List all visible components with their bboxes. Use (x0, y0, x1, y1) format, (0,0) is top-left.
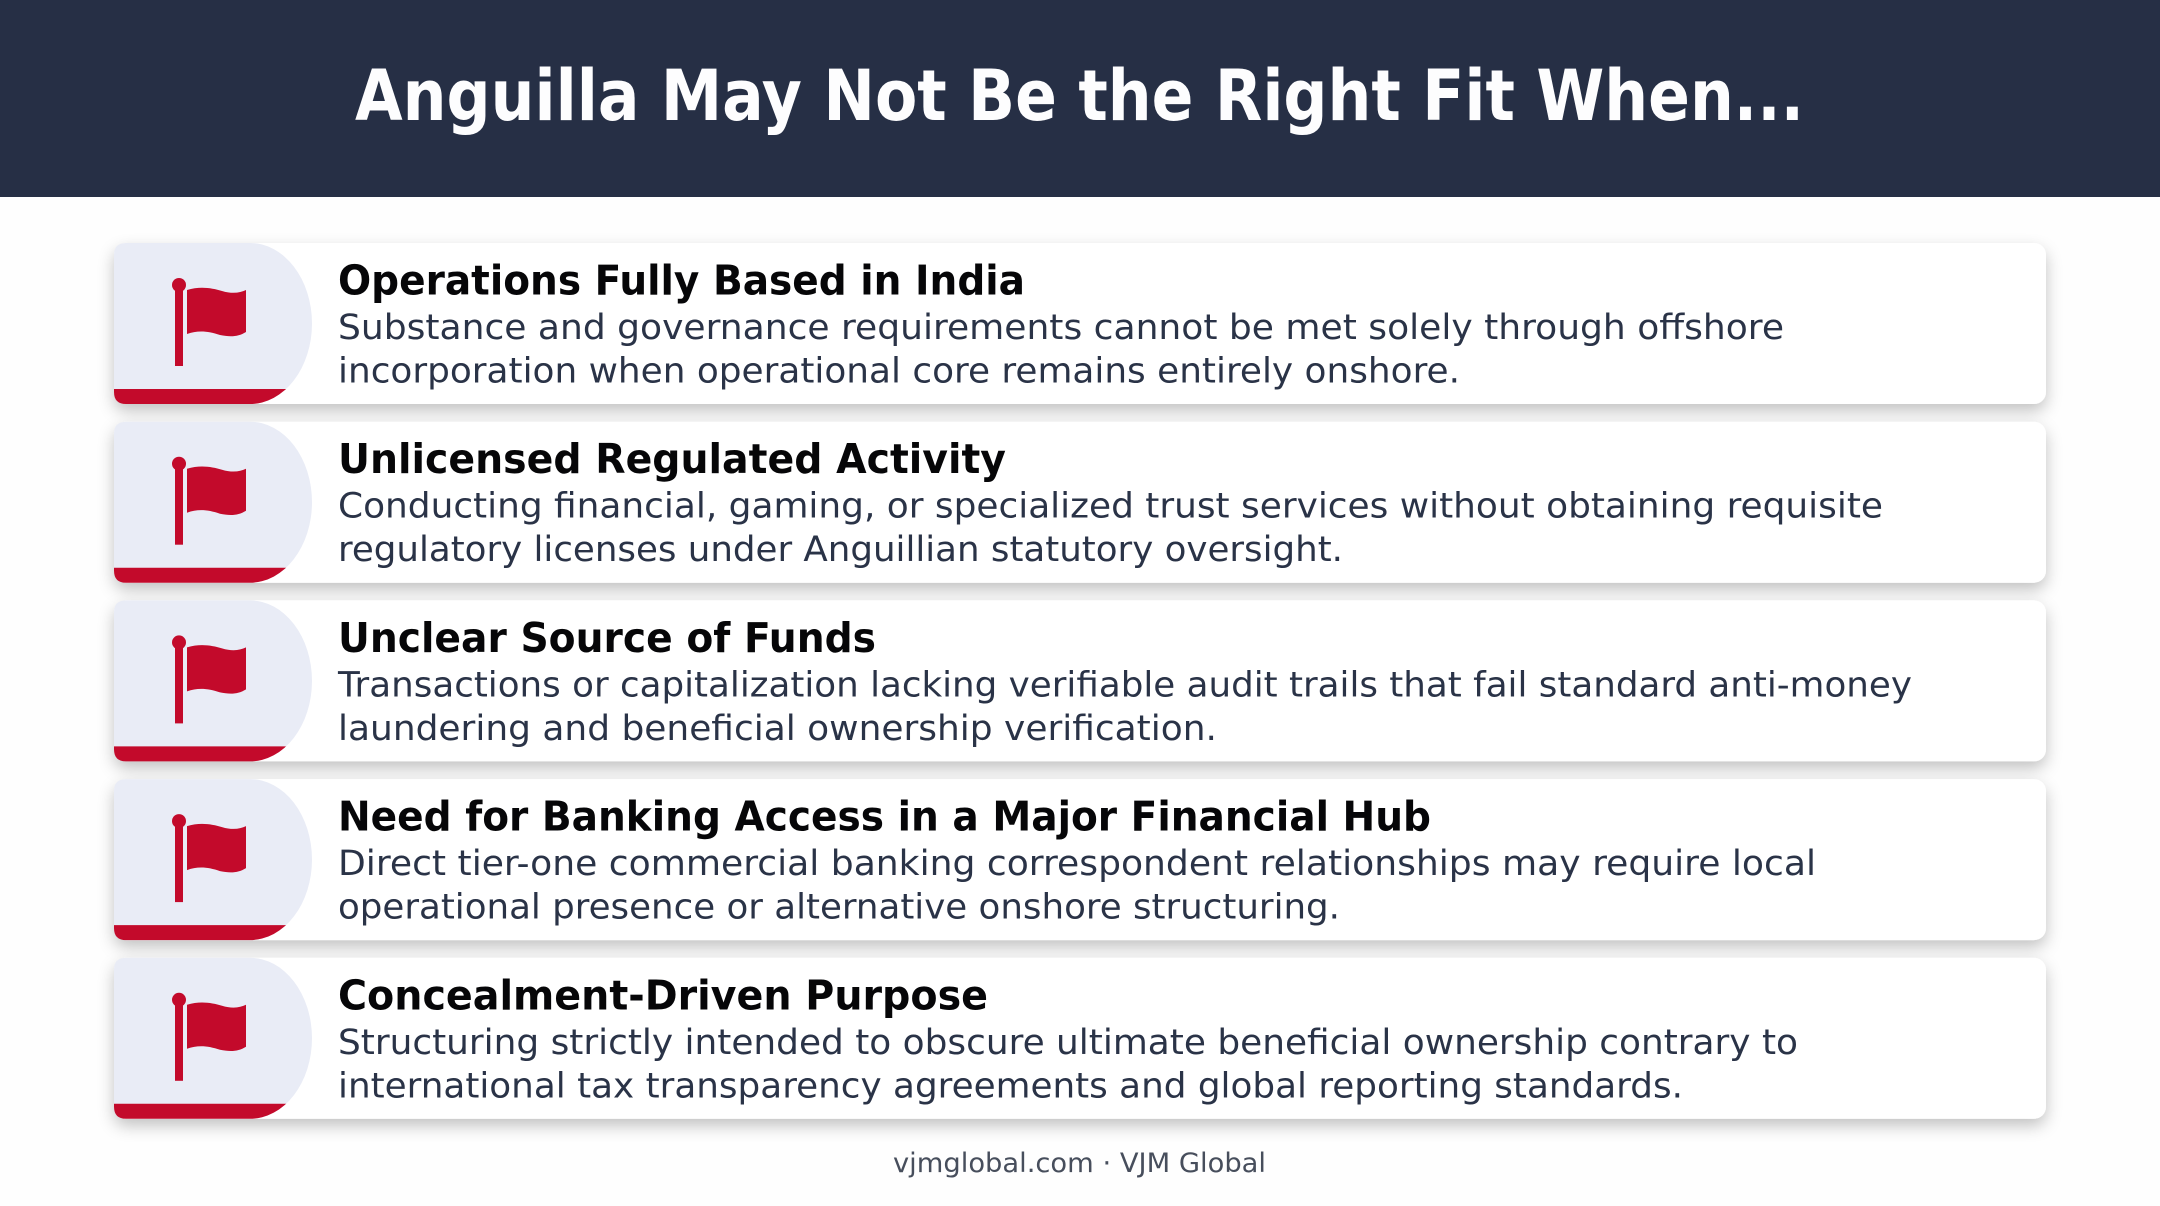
panel: operations fully based in India (114, 243, 2046, 404)
description: Substance and governance requirements cannot be met solely through offshore (338, 308, 1784, 348)
heading: Unlicensed Regulated Activity (338, 435, 1006, 483)
description: international tax transparency agreements and global reporting standards. (338, 1066, 1683, 1106)
description: Structuring strictly intended to obscure ultimate beneficial ownership contrary to (338, 1023, 1798, 1063)
icon: red flag (114, 243, 312, 404)
description (338, 308, 1784, 392)
description: Transactions or capitalization lacking verifiable audit trails that fail standard anti-money (337, 665, 1912, 705)
description (338, 487, 1883, 570)
description: Direct tier-one commercial banking correspondent relationships may require local (338, 844, 1816, 884)
description (338, 844, 1816, 928)
description: Conducting financial, gaming, or specialized trust services without obtaining requisite (338, 487, 1883, 527)
panel: unclear source of funds (114, 600, 2046, 761)
header banner (0, 0, 2160, 197)
description: operational presence or alternative onshore structuring. (338, 888, 1340, 928)
icon: red flag (114, 958, 312, 1119)
heading: Concealment-Driven Purpose (338, 971, 988, 1019)
panel: unlicensed regulated activity (114, 422, 2046, 583)
description (338, 1023, 1798, 1106)
heading: Unclear Source of Funds (338, 614, 876, 662)
icon: red flag (114, 779, 312, 940)
icon: red flag (114, 600, 312, 761)
panel: concealment-driven purpose (114, 958, 2046, 1119)
description: incorporation when operational core remains entirely onshore. (338, 352, 1460, 392)
heading: Operations Fully Based in India (338, 256, 1025, 304)
description: regulatory licenses under Anguillian statutory oversight. (338, 530, 1343, 570)
heading: Need for Banking Access in a Major Financial Hub (338, 793, 1431, 841)
title: Anguilla May Not Be the Right Fit When... (355, 55, 1804, 137)
icon: red flag (114, 422, 312, 583)
footer source: vjmglobal.com · VJM Global (893, 1148, 1266, 1179)
panel: need for banking access (114, 779, 2046, 940)
description (337, 665, 1912, 749)
description: laundering and beneficial ownership verification. (338, 709, 1217, 749)
